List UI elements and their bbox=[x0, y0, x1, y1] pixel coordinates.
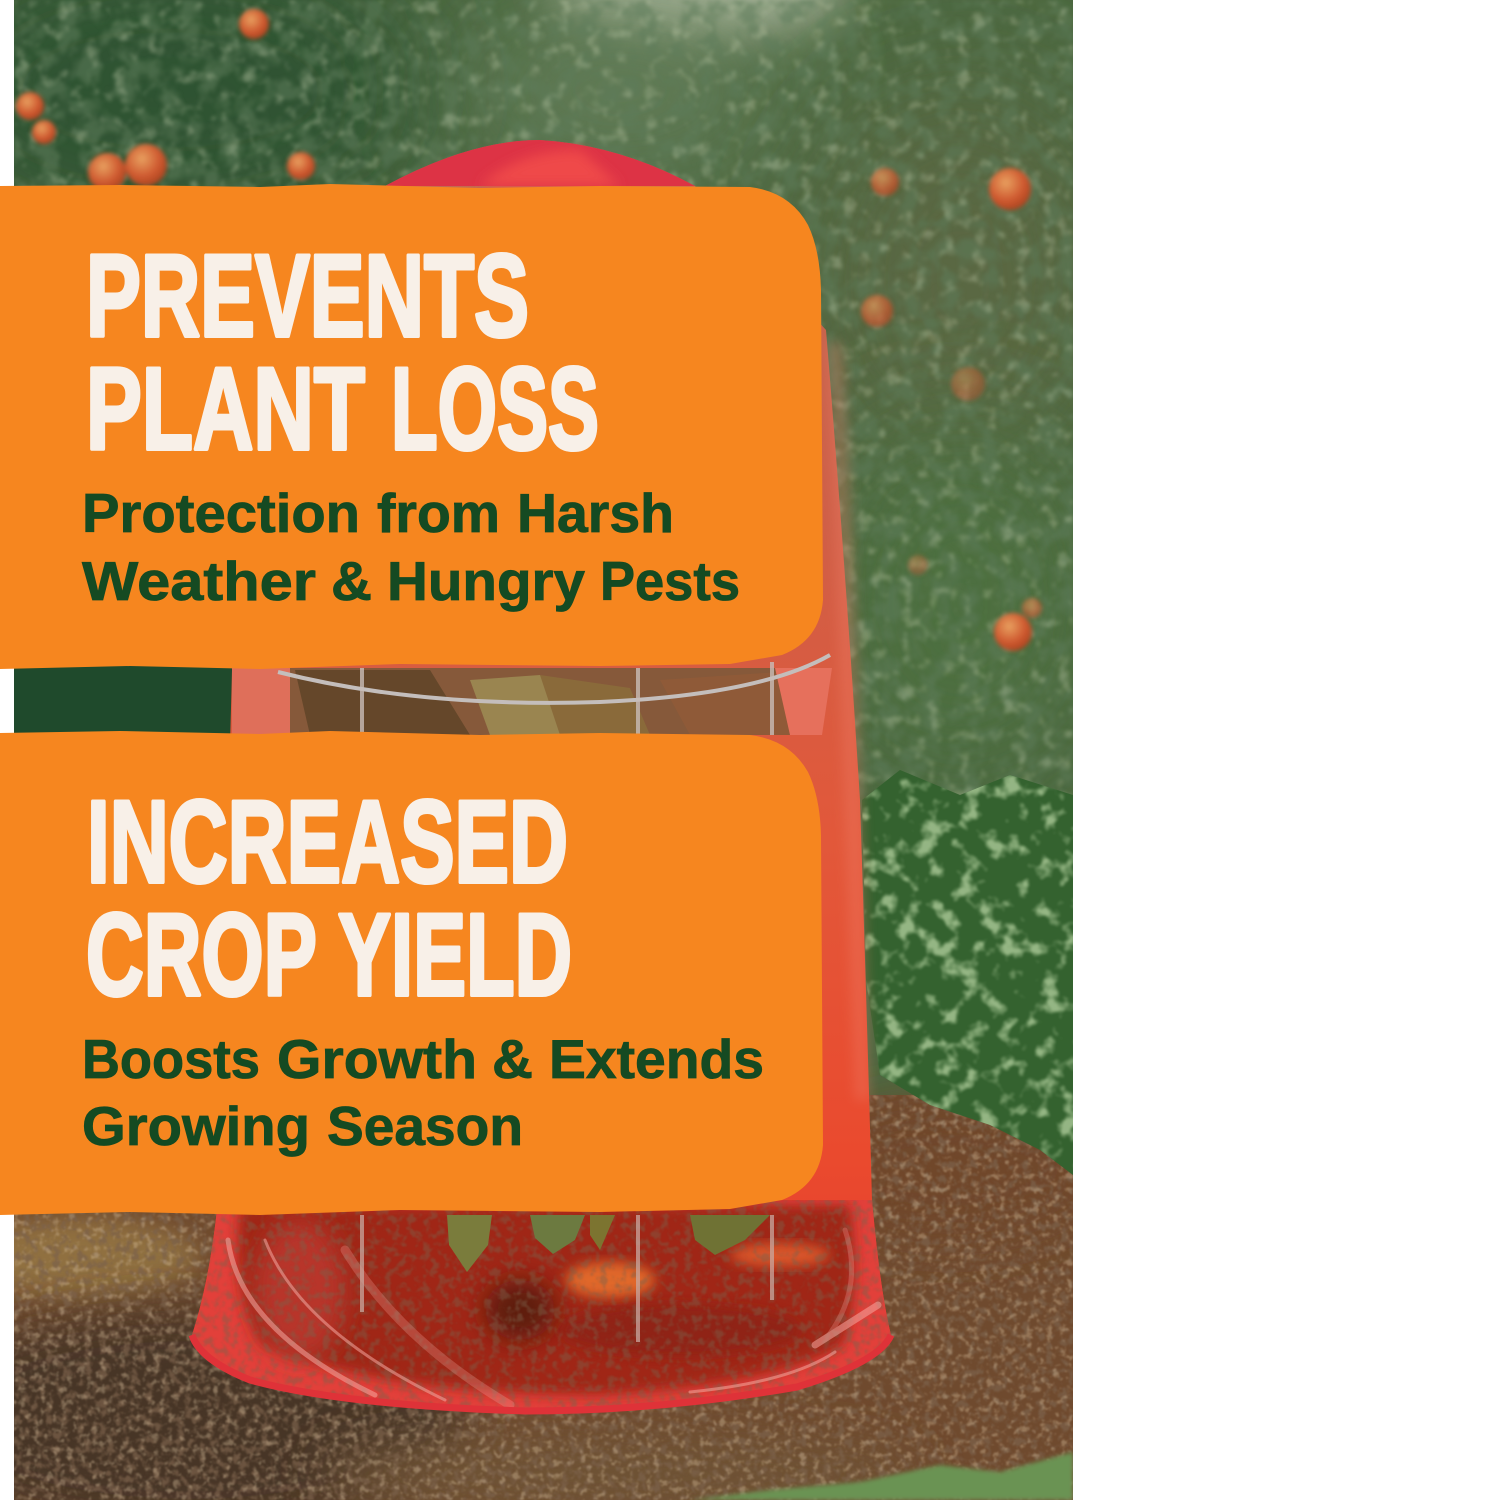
panel: increased crop yield bbox=[0, 731, 823, 1215]
wire cage hoop bbox=[278, 655, 830, 703]
subheading: & bbox=[331, 550, 372, 612]
subheading: Boosts bbox=[82, 1028, 260, 1090]
subheading: Season bbox=[327, 1095, 523, 1157]
side film sheen bbox=[828, 340, 870, 1100]
subheading: Protection bbox=[82, 482, 360, 544]
heading: LOSS bbox=[391, 343, 599, 474]
dark interior lower bbox=[180, 1200, 900, 1420]
film folds bbox=[228, 1230, 878, 1405]
subheading: Growing bbox=[82, 1095, 310, 1157]
ground mulch bbox=[0, 1095, 1100, 1500]
subheading: Harsh bbox=[517, 482, 674, 544]
bottom leaves bbox=[690, 1452, 1073, 1500]
heading: YIELD bbox=[338, 889, 572, 1020]
heading: INCREASED bbox=[87, 776, 568, 907]
bottom rim bbox=[192, 1335, 891, 1411]
subheading: Growth bbox=[277, 1028, 477, 1090]
heading bbox=[86, 776, 572, 1020]
panel background bbox=[0, 731, 823, 1215]
bag body bbox=[192, 140, 891, 1412]
subheading bbox=[82, 1028, 764, 1157]
upper window interior bbox=[232, 655, 832, 735]
subheading: Pests bbox=[600, 550, 740, 612]
subheading bbox=[82, 482, 740, 612]
subheading: Hungry bbox=[387, 550, 585, 612]
background photo: garden with tomato cover bbox=[0, 0, 1110, 1500]
lower wire stakes bbox=[362, 1215, 772, 1342]
dark hedge left bbox=[14, 666, 232, 734]
dome highlight bbox=[385, 140, 695, 186]
wire stakes bbox=[362, 662, 772, 735]
leaves inside lower bbox=[447, 1215, 770, 1272]
subheading: & bbox=[492, 1028, 533, 1090]
subheading: Extends bbox=[549, 1028, 764, 1090]
foliage backdrop bbox=[14, 0, 1073, 1095]
heading: CROP bbox=[86, 889, 317, 1020]
bush lower right bbox=[860, 765, 1075, 1180]
subheading: from bbox=[377, 482, 500, 544]
heading bbox=[86, 230, 599, 474]
subheading: Weather bbox=[82, 550, 316, 612]
panel background bbox=[0, 184, 823, 669]
red cover bag bbox=[180, 140, 900, 1420]
apples in tree bbox=[16, 9, 1042, 651]
heading: PLANT bbox=[86, 343, 365, 474]
heading: PREVENTS bbox=[86, 230, 529, 361]
panel: prevents plant loss bbox=[0, 184, 823, 669]
